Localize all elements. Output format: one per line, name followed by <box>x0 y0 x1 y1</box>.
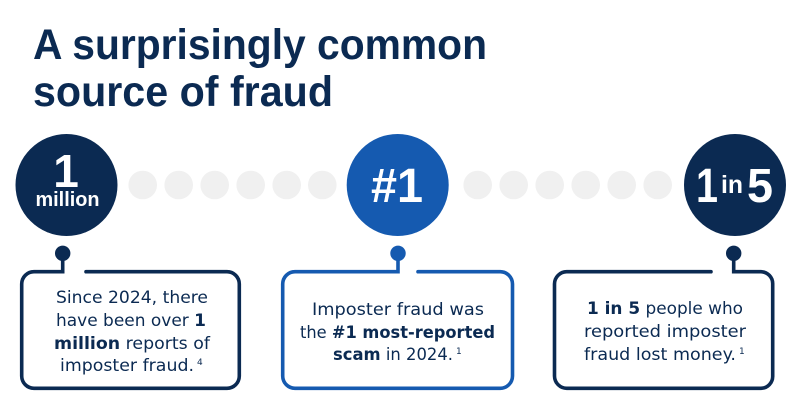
stat circle: #1 <box>347 134 449 236</box>
callout text: fraud lost money. <box>584 345 736 365</box>
callout text: scam in 2024. <box>333 345 453 365</box>
callout: 1 million reports <box>22 246 239 388</box>
title: source of fraud <box>33 68 333 116</box>
title: A surprisingly common <box>33 21 487 69</box>
stat circle: 1 in 5: 5 <box>747 160 773 213</box>
stat circle: #1: #1 <box>371 160 423 213</box>
callout text: Since 2024, there <box>56 288 208 308</box>
stat circle: 1 in 5: in <box>721 171 743 199</box>
stat circle: 1 in 5 <box>684 134 786 236</box>
callout text: million reports of <box>54 334 211 354</box>
callout: #1 most-reported scam <box>283 246 512 388</box>
callout text: Imposter fraud was <box>312 300 484 320</box>
callout text <box>300 300 495 365</box>
stat circle: 1 million: 1 <box>53 145 79 197</box>
stat circle: 1 in 5: 1 <box>696 160 718 213</box>
callout text <box>584 299 746 365</box>
stat circle: 1 million: million <box>36 189 100 211</box>
callout text: the #1 most-reported <box>300 323 495 343</box>
stat circle: 1 million <box>16 134 118 236</box>
callout text: 1 <box>456 347 462 357</box>
callout text: imposter fraud. <box>60 356 194 376</box>
callout text: 4 <box>197 358 203 368</box>
callout text: have been over 1 <box>56 311 206 331</box>
dotted connector: left <box>128 171 337 199</box>
callout: 1 in 5 lost money <box>554 246 773 388</box>
dotted connector: right <box>463 171 672 199</box>
callout text: 1 <box>739 347 745 357</box>
callout text: reported imposter <box>584 322 746 342</box>
callout text: 1 in 5 people who <box>587 299 743 319</box>
title <box>33 21 487 116</box>
callout text <box>54 288 211 376</box>
